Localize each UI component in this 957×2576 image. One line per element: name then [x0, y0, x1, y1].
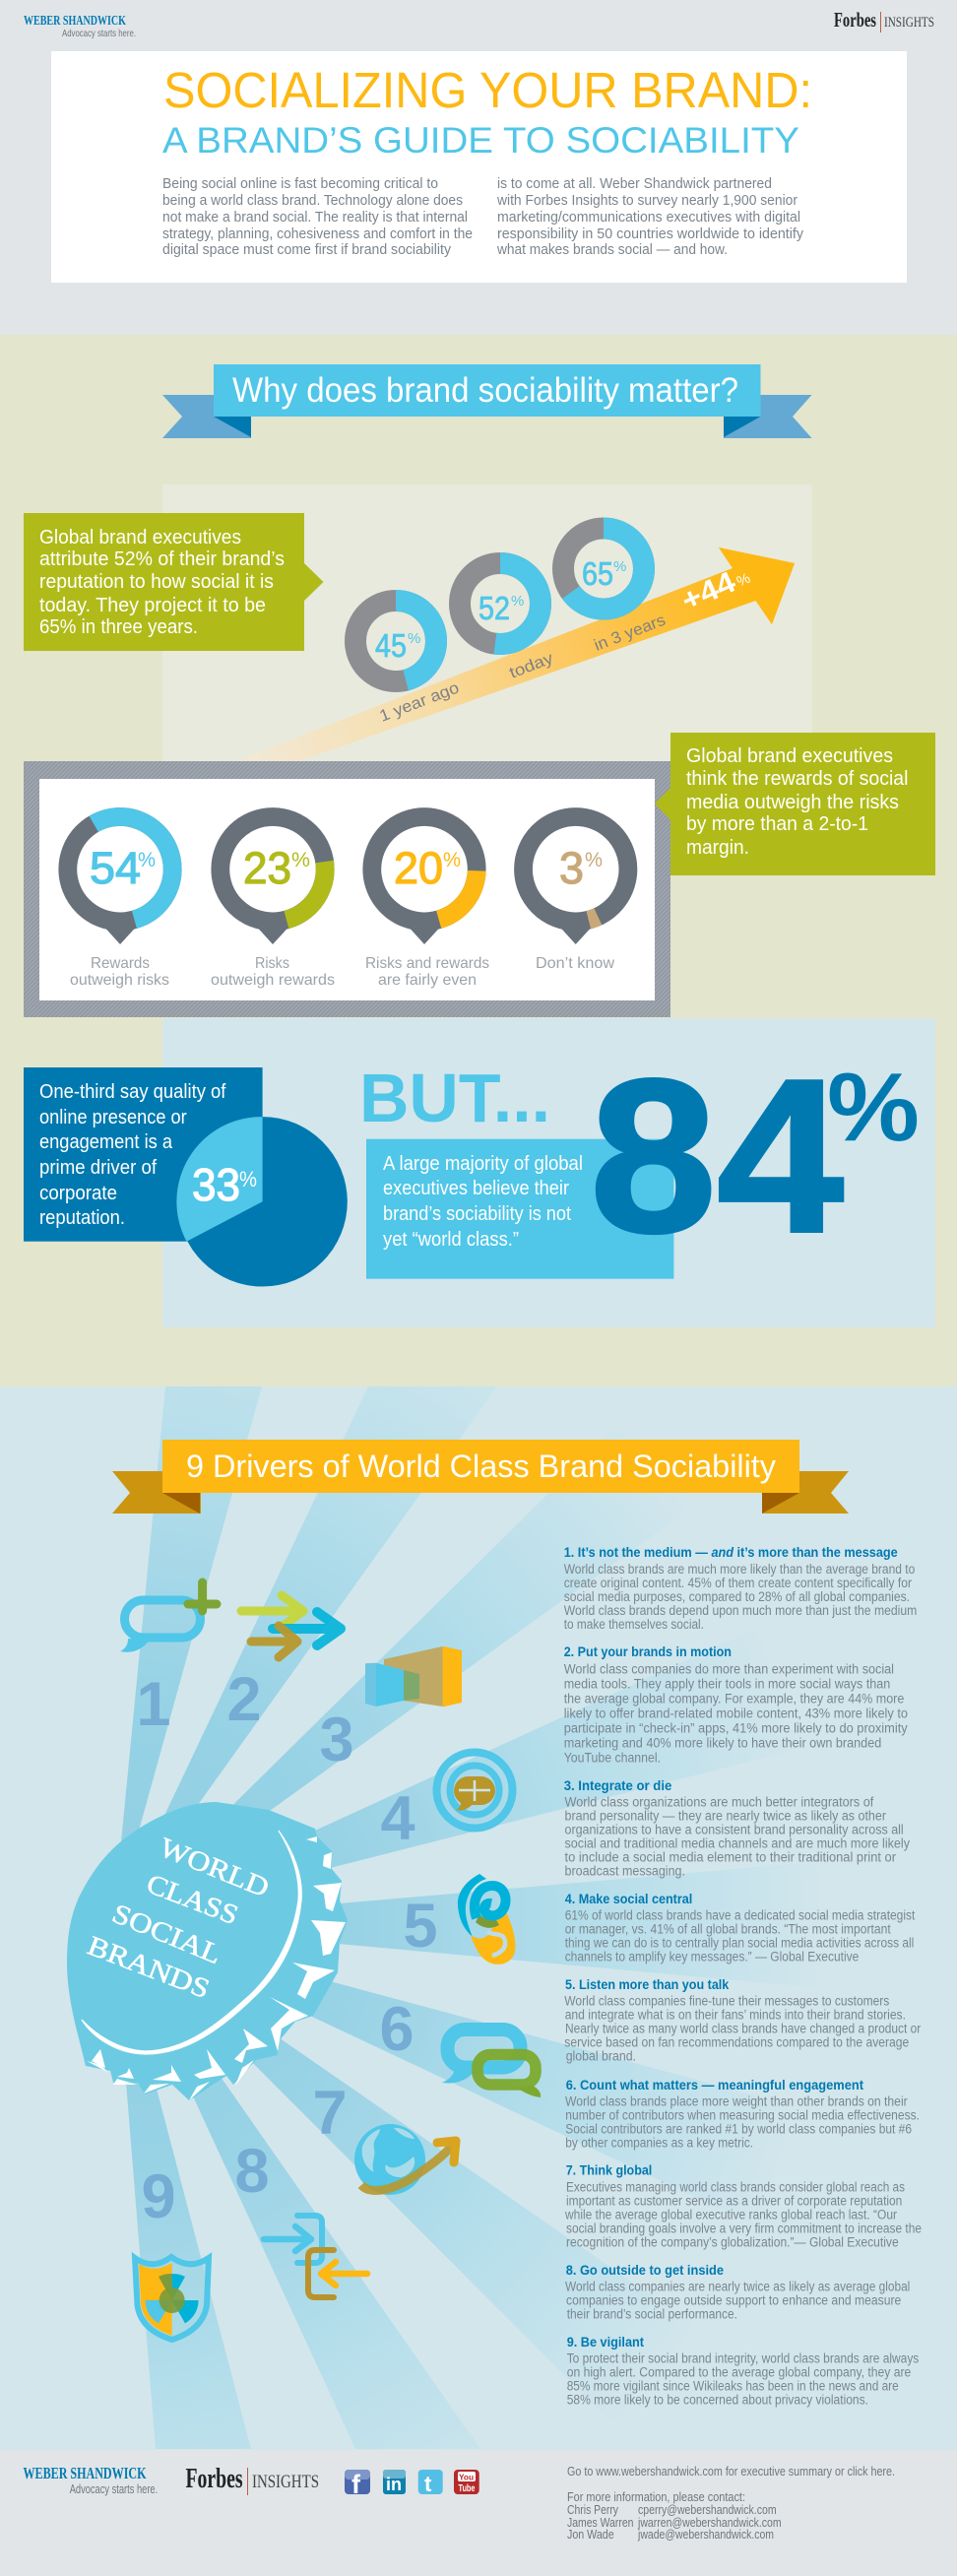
pin donut: 23% risks outweigh rewards: outweigh rewards: [211, 972, 335, 989]
banner: why does brand sociability matter: Why does brand sociability matter?: [232, 371, 738, 410]
icon: speech bubble with plus: [120, 1582, 217, 1652]
callout: one-third quality of online presence: corporate: [39, 1183, 117, 1204]
donut: 45% one year ago: %: [408, 630, 420, 647]
heading: BUT: BUT...: [359, 1060, 550, 1136]
driver 3 text: organizations to have a consistent brand personality across all: [565, 1822, 904, 1837]
pin donut: 23% risks outweigh rewards: [211, 810, 335, 989]
intro text column 1: being a world class brand. Technology alone does: [162, 193, 463, 209]
callout: one-third quality of online presence: [24, 1067, 263, 1242]
driver 2 text: 2. Put your brands in motion: [564, 1643, 732, 1659]
donut: 45% one year ago: [355, 601, 436, 681]
driver 5 text: service based on fan recommendations compared to the average: [564, 2034, 909, 2050]
callout: one-third quality of online presence: online presence or: [39, 1107, 187, 1128]
pin donut: 20% risks and rewards even: %: [443, 849, 461, 871]
driver 5 text: Nearly twice as many world class brands have changed a product or: [565, 2021, 922, 2036]
number 3: 3: [319, 1706, 354, 1774]
background: drivers section: [0, 1386, 957, 2450]
pin donut: 3% don't know: [506, 800, 645, 972]
background: footer: [0, 2450, 957, 2576]
logo: Forbes Insights top: Forbes: [834, 8, 876, 32]
driver 1 text: World class brands depend upon much more than just the medium: [564, 1603, 917, 1618]
callout: rewards outweigh the risks: Global brand executives: [686, 745, 893, 767]
cap label: SOCIAL: [107, 1899, 225, 1970]
callout: majority not world class: [366, 1139, 673, 1279]
driver 2 text: likely to offer brand-related mobile content, 43% more likely to: [564, 1706, 908, 1721]
pin donut: 23% risks outweigh rewards: %: [291, 849, 310, 871]
number 7: 7: [312, 2079, 348, 2148]
intro text column 2: marketing/communications executives with digital: [497, 210, 800, 225]
driver 1 text: [564, 1544, 917, 1632]
donut: 52% today: %: [511, 593, 524, 610]
pin donut: 54% rewards outweigh risks: outweigh risks: [70, 972, 169, 989]
driver 3 text: World class organizations are much better integrators of: [565, 1794, 874, 1810]
footer contact text: jwade@webershandwick.com: [637, 2528, 774, 2542]
panel: intro: [51, 51, 907, 283]
driver 4 text: 4. Make social central: [565, 1891, 692, 1906]
footer contact text: Chris Perry: [567, 2503, 619, 2517]
callout: reputation attribution: attribute 52% of their brand’s: [39, 548, 285, 570]
intro text column 2: with Forbes Insights to survey nearly 1,900 senior: [496, 193, 798, 209]
donut: 65% in three years: %: [613, 558, 626, 575]
icon: Facebook: f: [351, 2470, 361, 2499]
driver 7 text: while the average global executive ranks global reach last. “Our: [564, 2208, 897, 2222]
icon: YouTube: [454, 2470, 479, 2494]
logo: Forbes Insights footer: [185, 2464, 319, 2495]
icon: ear: [458, 1874, 515, 1964]
driver 2 text: participate in “check-in” apps, 41% more likely to do proximity: [564, 1721, 908, 1735]
driver 3 text: social and traditional media channels and are much more likely: [565, 1835, 910, 1851]
footer contact text: Jon Wade: [567, 2528, 614, 2542]
callout: reputation attribution: Global brand executives: [39, 527, 241, 548]
intro text column 2: what makes brands social — and how.: [496, 242, 728, 258]
intro text column 1: Being social online is fast becoming critical to: [162, 176, 438, 192]
banner: why does brand sociability matter: [162, 364, 811, 438]
logo: Weber Shandwick footer: WEBER SHANDWICK: [24, 2464, 147, 2482]
pin donut: 20% risks and rewards even: Risks and rewards: [365, 955, 489, 972]
driver 9 text: 58% more likely to be concerned about privacy violations.: [567, 2393, 868, 2407]
donut: 52% today: 52: [478, 590, 510, 626]
background: header: [0, 0, 957, 335]
logo: Weber Shandwick top: [24, 14, 136, 39]
driver 2 text: the average global company. For example, they are 44% more: [564, 1692, 904, 1706]
intro text column 2: [496, 176, 804, 258]
driver 4 text: 61% of world class brands have a dedicated social media strategist: [565, 1908, 916, 1922]
pin donut: 3% don't know: %: [585, 849, 603, 871]
number 5: 5: [403, 1892, 438, 1961]
callout: rewards outweigh the risks: margin.: [686, 837, 749, 859]
driver 9 text: [567, 2334, 920, 2407]
arrow: growth trend: in 3 years: [592, 612, 668, 655]
arrow: growth trend: %: [734, 570, 753, 591]
icon: two speech bubbles: [442, 2029, 541, 2097]
icon: brackets with arrows: [264, 2216, 367, 2297]
callout: one-third quality of online presence: engagement is a: [39, 1131, 173, 1153]
driver 4 text: or manager, vs. 41% of all global brands. “The most important: [565, 1922, 891, 1936]
sunburst rays: [113, 1386, 950, 2449]
callout: rewards outweigh the risks: media outweigh the risks: [686, 792, 899, 813]
pin donut: 23% risks outweigh rewards: 23: [243, 843, 291, 893]
driver 4 text: channels to amplify key messages.” — Global Executive: [565, 1950, 859, 1964]
logo: Forbes Insights footer: Forbes: [185, 2464, 243, 2494]
driver 8 text: their brand’s social performance.: [567, 2306, 737, 2322]
icon: globe with arrow: [354, 2124, 456, 2195]
callout: one-third quality of online presence: One-third say quality of: [39, 1081, 226, 1103]
driver 2 text: [564, 1643, 908, 1765]
donut: 45% one year ago: 45: [375, 627, 407, 664]
arrow: growth trend: 1 year ago: [377, 678, 462, 726]
icon: Facebook: [345, 2470, 370, 2499]
logo: Weber Shandwick footer: [24, 2464, 158, 2496]
driver 7 text: [564, 2162, 922, 2249]
footer contact text: jwarren@webershandwick.com: [637, 2516, 782, 2530]
driver 2 text: World class companies do more than experiment with social: [564, 1662, 894, 1676]
pin donut: 20% risks and rewards even: are fairly even: [378, 972, 477, 989]
driver 5 text: global brand.: [566, 2048, 636, 2064]
background: why section: [0, 335, 957, 1386]
driver 6 text: number of contributors when measuring social media effectiveness.: [565, 2107, 920, 2123]
pin donut: 54% rewards outweigh risks: %: [138, 849, 156, 871]
driver 2 text: media tools. They apply their tools in more social ways than: [564, 1676, 890, 1692]
driver 1 text: create original content. 45% of them create content specifically for: [564, 1576, 912, 1590]
driver 1 text: to make themselves social.: [564, 1617, 704, 1632]
driver 8 text: companies to engage outside support to enhance and measure: [566, 2292, 901, 2308]
pin donut: 3% don't know: 3: [559, 843, 584, 893]
intro text column 1: strategy, planning, cohesiveness and comfort in the: [162, 226, 473, 242]
icon: Twitter: [418, 2470, 443, 2496]
pie chart: 33 percent: %: [239, 1167, 257, 1191]
driver 3 text: 3. Integrate or die: [564, 1777, 671, 1793]
footer contact text: James Warren: [567, 2516, 634, 2530]
icon: Twitter: t: [424, 2472, 432, 2496]
driver 6 text: by other companies as a key metric.: [565, 2135, 753, 2151]
donut: 65% in three years: 65: [582, 555, 613, 592]
arrow: growth trend: +44: [676, 565, 740, 617]
pin donut: 54% rewards outweigh risks: [48, 798, 192, 989]
driver 9 text: on high alert. Compared to the average global company, they are: [567, 2365, 911, 2379]
icon: YouTube: Tube: [459, 2483, 476, 2494]
logo: Weber Shandwick top: Advocacy starts here.: [62, 28, 136, 39]
icon: LinkedIn: [383, 2470, 406, 2494]
panel: light backing: [162, 484, 811, 770]
driver 1 text: 1. It’s not the medium — and it’s more than the message: [564, 1544, 898, 1560]
pin donut: 3% don't know: Don’t know: [536, 955, 614, 972]
icon: target with speech bubble: [437, 1753, 512, 1828]
driver 5 text: and integrate what is on their fans’ minds into their brand stories.: [565, 2007, 906, 2023]
pie chart: 33 percent: [176, 1117, 348, 1287]
intro text column 1: digital space must come first if brand sociability: [162, 242, 452, 258]
logo: Weber Shandwick top: WEBER SHANDWICK: [24, 14, 126, 29]
panel: rewards vs risks: [24, 761, 670, 1017]
pie chart: 33 percent: 33: [192, 1159, 240, 1210]
callout: majority not world class: yet “world class.”: [383, 1229, 519, 1251]
driver 6 text: [565, 2077, 920, 2151]
intro text column 2: is to come at all. Weber Shandwick partnered: [497, 176, 772, 192]
logo: Weber Shandwick footer: Advocacy starts here.: [70, 2481, 158, 2496]
callout: majority not world class: brand’s sociability is not: [383, 1203, 571, 1225]
cap label: [83, 1833, 273, 2005]
number 9: 9: [141, 2162, 176, 2231]
number 1: 1: [136, 1670, 171, 1739]
donut: 52% today: [460, 563, 541, 644]
intro text column 1: not make a brand social. The reality is that internal: [162, 210, 468, 225]
icon: YouTube: You: [459, 2474, 474, 2481]
driver 2 text: YouTube channel.: [564, 1751, 661, 1765]
driver 3 text: broadcast messaging.: [565, 1863, 685, 1879]
callout: reputation attribution: 65% in three years.: [39, 616, 198, 638]
pin donut: 54% rewards outweigh risks: Rewards: [91, 955, 150, 972]
footer contact text: Go to www.webershandwick.com for executive summary or click here.: [567, 2465, 895, 2479]
title: SOCIALIZING YOUR BRAND:: [163, 62, 812, 118]
callout: reputation attribution: [24, 513, 323, 651]
callout: majority not world class: A large majority of global: [383, 1153, 583, 1175]
callout: one-third quality of online presence: reputation.: [39, 1207, 125, 1229]
logo: Forbes Insights footer: INSIGHTS: [252, 2472, 319, 2492]
driver 6 text: Social contributors are ranked #1 by world class companies but #6: [565, 2121, 912, 2137]
callout: reputation attribution: reputation to how social it is: [39, 571, 274, 593]
footer contact text: cperry@webershandwick.com: [638, 2503, 777, 2517]
icon: megaphone shapes: [365, 1646, 462, 1707]
driver 9 text: To protect their social brand integrity, world class brands are always: [567, 2351, 920, 2365]
subtitle: A BRAND’S GUIDE TO SOCIABILITY: [162, 119, 799, 161]
callout: rewards outweigh the risks: think the rewards of social: [686, 768, 908, 790]
number 8: 8: [234, 2137, 270, 2206]
driver 3 text: to include a social media element to their traditional print or: [565, 1849, 896, 1865]
driver 4 text: thing we can do is to centrally plan social media activities across all: [565, 1936, 914, 1950]
icon: radiation shield: [135, 2257, 209, 2340]
callout: one-third quality of online presence: prime driver of: [39, 1157, 157, 1179]
driver 5 text: [564, 1976, 922, 2064]
big number: 84 percent: 84: [590, 1034, 844, 1278]
icon: LinkedIn: in: [386, 2475, 402, 2494]
panel: but 84 percent backing: [162, 1018, 935, 1327]
driver 7 text: important as customer service as a driver of corporate reputation: [566, 2194, 902, 2208]
driver 9 text: 9. Be vigilant: [567, 2334, 644, 2350]
footer contact text: [567, 2465, 895, 2542]
driver 5 text: World class companies fine-tune their messages to customers: [564, 1993, 890, 2009]
pin donut: 20% risks and rewards even: [365, 815, 489, 989]
donut: 65% in three years: [563, 528, 644, 609]
icon: arrows in motion: [241, 1595, 341, 1657]
callout: rewards outweigh the risks: [655, 733, 935, 875]
driver 7 text: social branding goals involve a very firm commitment to increase the: [566, 2222, 922, 2235]
cap label: BRANDS: [83, 1931, 214, 2005]
big number: 84 percent: %: [827, 1053, 920, 1161]
number 4: 4: [380, 1784, 415, 1853]
driver 1 text: social media purposes, compared to 28% of all global companies.: [564, 1589, 910, 1604]
driver 8 text: [565, 2262, 910, 2322]
driver 9 text: 85% more vigilant since Wikileaks has been in the news and are: [567, 2379, 899, 2393]
callout: majority not world class: executives believe their: [383, 1178, 569, 1199]
bottle cap: world class social brands: [67, 1802, 348, 2100]
cap label: CLASS: [142, 1869, 242, 1931]
callout: reputation attribution: today. They project it to be: [39, 595, 266, 616]
number 2: 2: [226, 1665, 262, 1734]
driver 7 text: recognition of the company’s globalization.”— Global Executive: [566, 2235, 899, 2249]
banner: 9 drivers: 9 Drivers of World Class Brand Sociability: [186, 1449, 776, 1484]
driver 2 text: marketing and 40% more likely to have their own branded: [564, 1735, 881, 1751]
pin donut: 20% risks and rewards even: 20: [394, 843, 443, 893]
arrow: growth trend: [235, 547, 795, 761]
driver 5 text: 5. Listen more than you talk: [565, 1976, 729, 1992]
callout: rewards outweigh the risks: by more than a 2-to-1: [686, 813, 868, 835]
intro text column 1: [162, 176, 473, 258]
banner: 9 drivers: [112, 1440, 849, 1513]
driver 6 text: 6. Count what matters — meaningful engagement: [566, 2077, 863, 2093]
intro text column 2: responsibility in 50 countries worldwide to identify: [497, 226, 804, 242]
driver 3 text: brand personality — they are nearly twice as likely as other: [565, 1808, 886, 1824]
logo: Forbes Insights top: [834, 8, 934, 32]
driver 7 text: Executives managing world class brands consider global reach as: [566, 2180, 905, 2194]
cap label: WORLD: [155, 1833, 273, 1903]
driver 8 text: World class companies are nearly twice as likely as average global: [565, 2279, 910, 2294]
driver 3 text: [564, 1777, 910, 1879]
driver 4 text: [565, 1891, 916, 1964]
driver 6 text: World class brands place more weight than other brands on their: [565, 2093, 908, 2109]
pin donut: 23% risks outweigh rewards: Risks: [255, 955, 289, 972]
number 6: 6: [379, 1995, 415, 2064]
arrow: growth trend: today: [507, 649, 556, 682]
pin donut: 54% rewards outweigh risks: 54: [90, 843, 141, 893]
logo: Forbes Insights top: INSIGHTS: [884, 15, 934, 31]
driver 1 text: World class brands are much more likely than the average brand to: [564, 1562, 915, 1577]
footer contact text: For more information, please contact:: [567, 2490, 745, 2504]
driver 8 text: 8. Go outside to get inside: [566, 2262, 724, 2278]
driver 7 text: 7. Think global: [566, 2162, 652, 2178]
